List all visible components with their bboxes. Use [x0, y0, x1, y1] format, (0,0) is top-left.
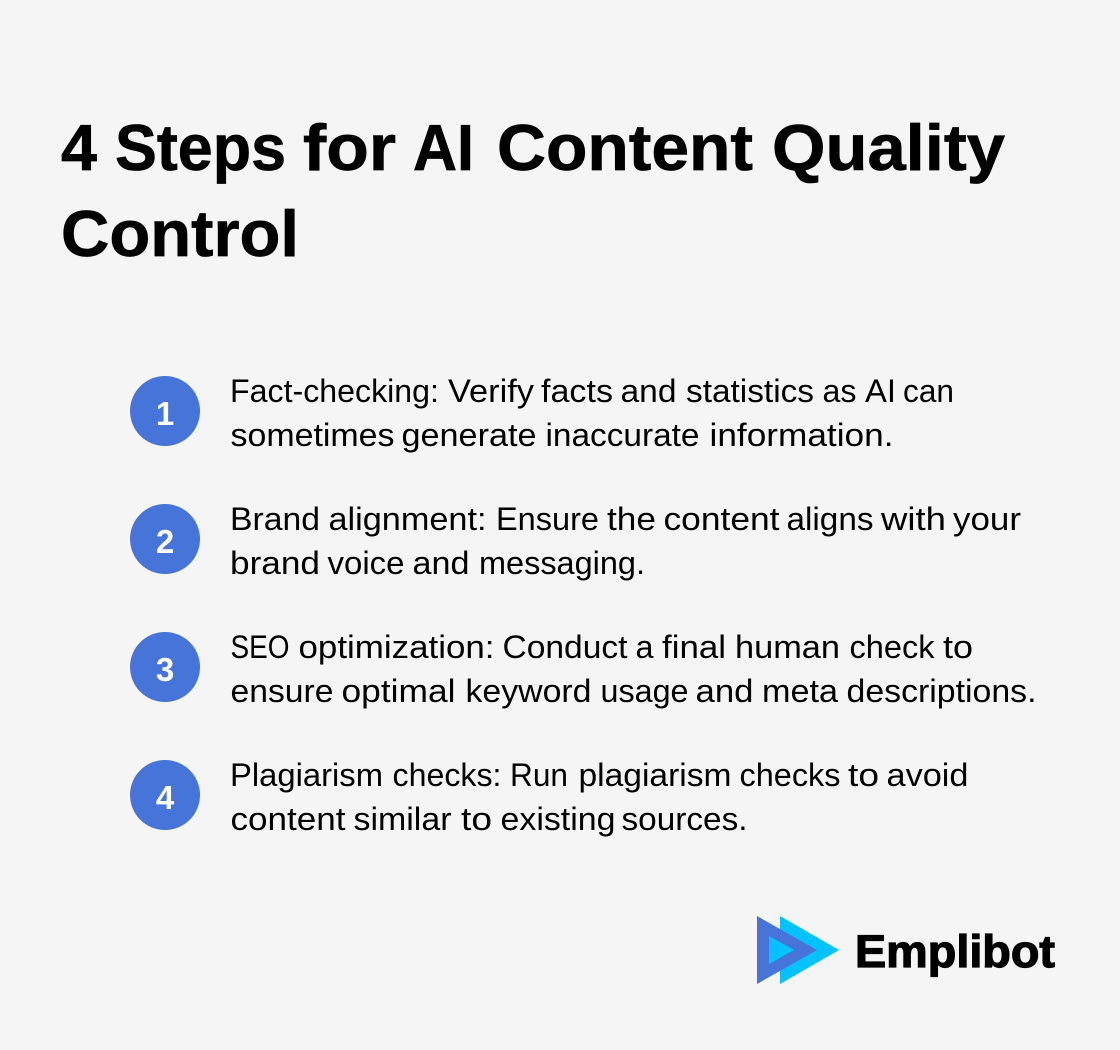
step 3 text: human: [735, 629, 840, 665]
step 3 text: final: [662, 629, 726, 665]
step 2 text: Brand: [230, 501, 320, 537]
number badge 1: 1: [156, 395, 174, 432]
step 2 text: and: [412, 545, 470, 581]
number badge 4: 4: [156, 779, 175, 816]
step 3 text: descriptions.: [846, 673, 1036, 709]
step 3 text: SEO: [230, 629, 290, 665]
step 1 text: statistics: [686, 373, 814, 409]
step 3 text: [230, 629, 1036, 709]
step 4 text: existing: [500, 801, 616, 837]
step 4: plagiarism checks: [130, 757, 968, 837]
step 1: fact-checking: [130, 373, 954, 453]
step 1 text: Fact-checking:: [230, 373, 439, 409]
step 4 text: to: [848, 757, 879, 793]
step 3 text: optimal: [342, 673, 456, 709]
step 1 text: Verify: [448, 373, 535, 409]
step 1 text: and: [620, 373, 676, 409]
step 2 text: [230, 501, 1021, 581]
step 3 text: and: [696, 673, 754, 709]
step 1 text: [230, 373, 954, 453]
step 4 text: Run: [510, 757, 568, 793]
step 4 text: Plagiarism: [230, 757, 383, 793]
step 2 text: Ensure: [496, 501, 599, 537]
step 3: SEO optimization: [130, 629, 1036, 709]
step 2 text: alignment:: [328, 501, 486, 537]
number badge 1: [130, 376, 200, 446]
step 2 text: the: [607, 501, 656, 537]
step 4 text: plagiarism: [578, 757, 732, 793]
step 4 text: to: [461, 801, 492, 837]
step 4 text: similar: [354, 801, 452, 837]
number badge 2: 2: [156, 523, 174, 560]
step 2 text: messaging.: [479, 545, 645, 581]
step 3 text: a: [636, 629, 654, 665]
title: 4: [61, 111, 97, 184]
step 2 text: brand: [230, 545, 320, 581]
step 4 text: checks: [740, 757, 840, 793]
number badge 4: [130, 760, 200, 830]
step 1 text: information.: [710, 417, 894, 453]
step 3 text: check: [850, 629, 935, 665]
step 4 text: content: [230, 801, 346, 837]
title: for: [303, 111, 396, 184]
title: AI: [413, 111, 474, 184]
wordmark: Emplibot: [855, 926, 1055, 977]
title: Quality: [772, 111, 1005, 184]
Emplibot logo: [757, 916, 1055, 984]
step 2: brand alignment: [130, 501, 1021, 581]
step 3 text: optimization:: [298, 629, 494, 665]
step 1 text: generate: [402, 417, 536, 453]
step 1 text: as: [822, 373, 856, 409]
step 3 text: keyword: [466, 673, 592, 709]
step 2 text: your: [953, 501, 1021, 537]
title: Control: [61, 197, 299, 270]
title: Steps: [115, 111, 286, 184]
number badge 3: 3: [156, 651, 174, 688]
step 1 text: sometimes: [230, 417, 394, 453]
step 2 text: aligns: [786, 501, 874, 537]
step 1 text: inaccurate: [546, 417, 700, 453]
title: [61, 111, 1005, 270]
step 3 text: usage: [600, 673, 688, 709]
step 3 text: ensure: [230, 673, 334, 709]
step 3 text: Conduct: [502, 629, 628, 665]
number badge 2: [130, 504, 200, 574]
step 3 text: meta: [762, 673, 839, 709]
step 4 text: sources.: [622, 801, 748, 837]
step 1 text: facts: [541, 373, 613, 409]
icon: play triangles: [757, 916, 839, 984]
step 4 text: [230, 757, 968, 837]
step 4 text: checks:: [392, 757, 502, 793]
step 1 text: can: [903, 373, 954, 409]
step 4 text: avoid: [886, 757, 968, 793]
step 3 text: to: [943, 629, 973, 665]
step 1 text: AI: [865, 373, 896, 409]
title: Content: [497, 111, 753, 184]
step 2 text: voice: [328, 545, 404, 581]
number badge 3: [130, 632, 200, 702]
step 2 text: content: [664, 501, 780, 537]
step 2 text: with: [880, 501, 946, 537]
